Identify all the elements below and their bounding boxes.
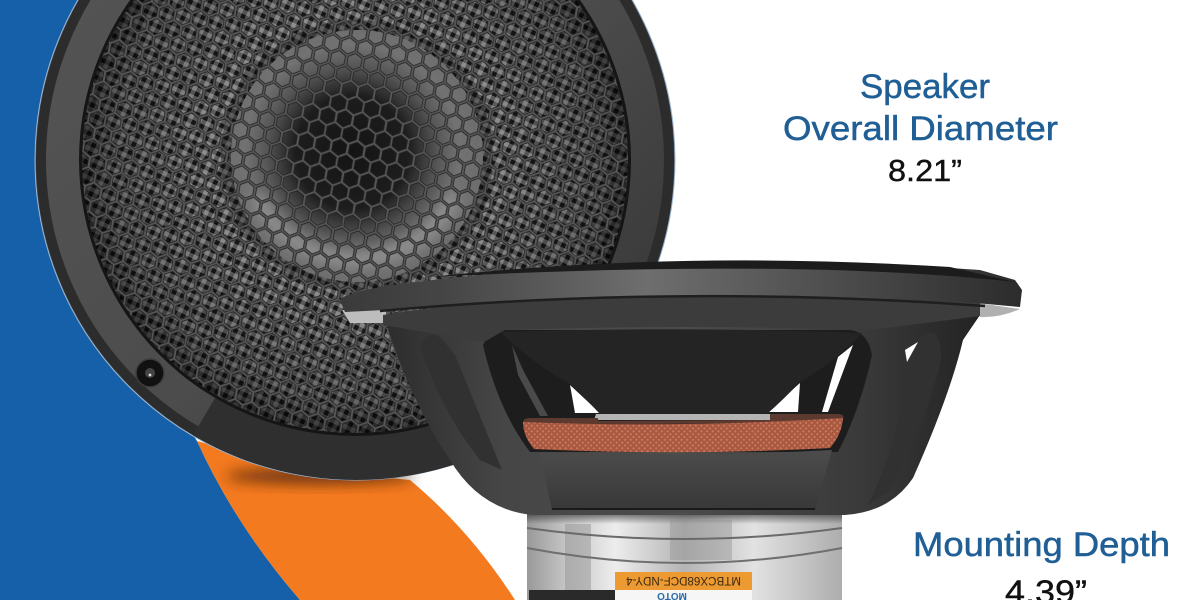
basket outer slots <box>420 335 502 470</box>
basket top ring <box>383 287 980 342</box>
strut highlights <box>512 345 548 416</box>
product label: MTBCX68DCF-NDY-4 <box>626 574 741 588</box>
flange groove <box>380 296 985 311</box>
white gap left <box>570 385 600 413</box>
background: orange swoosh <box>197 441 515 600</box>
label: mounting depth <box>913 526 1170 600</box>
red surround <box>523 414 843 452</box>
heading: Mounting Depth <box>913 526 1170 564</box>
basket frame <box>383 315 980 515</box>
lower ring shadow segment <box>205 310 612 456</box>
speaker front view <box>35 0 675 480</box>
label: speaker overall diameter <box>783 68 1058 188</box>
bottom plate <box>540 450 832 510</box>
flange <box>340 262 1022 312</box>
plate shadow line <box>552 508 815 510</box>
white gap right <box>767 383 800 412</box>
shadow under speaker <box>225 468 415 484</box>
silver cone collar <box>594 414 773 420</box>
flange underside highlight left <box>342 308 386 323</box>
product label <box>615 572 752 600</box>
metal grille <box>82 0 628 433</box>
foam gasket <box>430 260 1015 282</box>
cone opening <box>483 330 872 452</box>
paper cone <box>500 329 862 414</box>
flange underside highlight right <box>978 303 1020 317</box>
speaker side view <box>340 260 1022 600</box>
heading line 1: Speaker <box>860 68 990 106</box>
value: 8.21” <box>888 153 962 188</box>
mounting screw <box>136 359 164 387</box>
magnet <box>527 508 842 600</box>
background: blue panel <box>0 0 300 600</box>
heading line 2: Overall Diameter <box>783 110 1058 148</box>
right white sliver <box>905 342 918 362</box>
outer ring <box>35 0 675 480</box>
